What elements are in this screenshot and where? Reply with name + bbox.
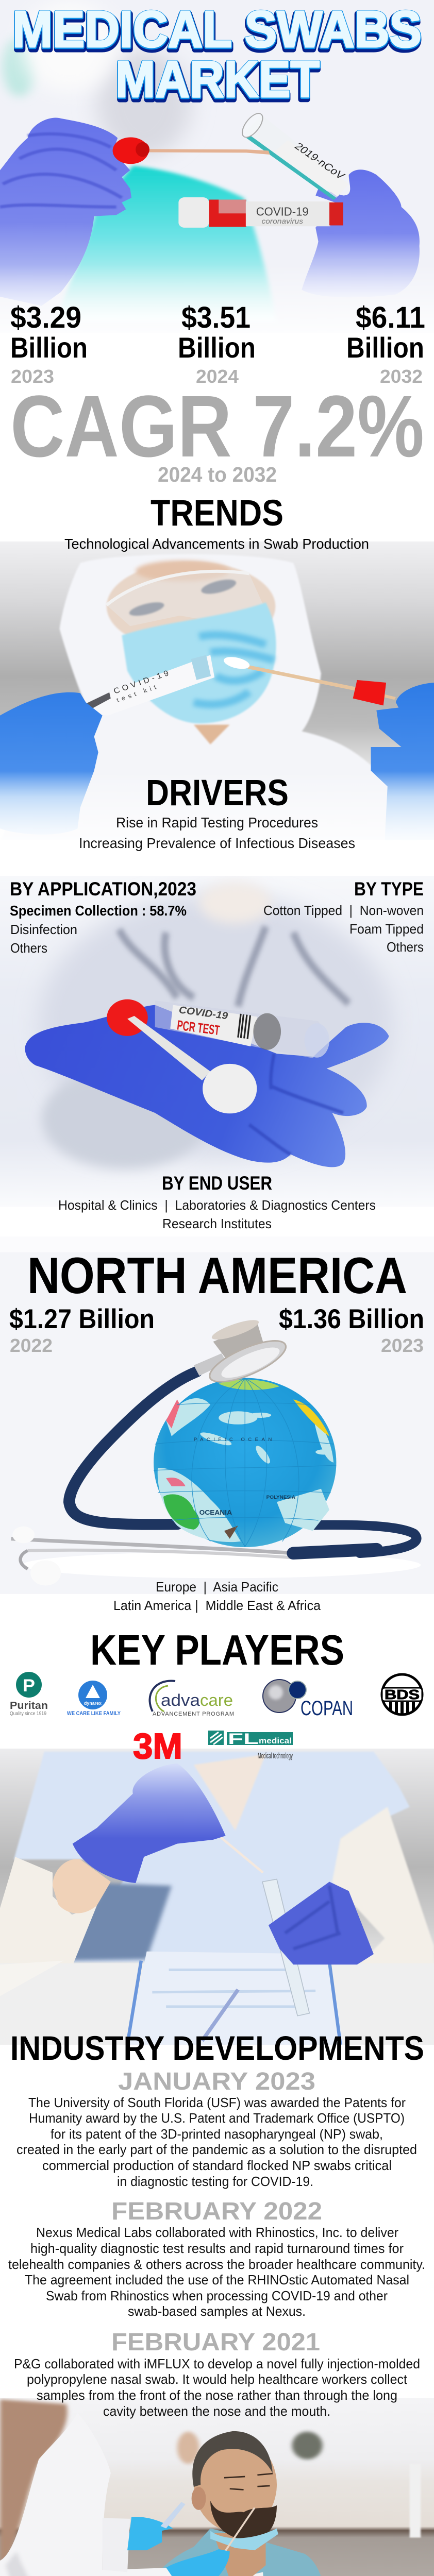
stethoscope chest piece <box>194 1316 291 1390</box>
segment: by end user: Hospital & Clinics | Laboratories & Diagnostics Centers <box>58 1197 376 1213</box>
doctor: hair <box>0 2399 68 2565</box>
right glove <box>302 170 420 297</box>
development: January 2023: in diagnostic testing for COVID-19. <box>117 2174 313 2189</box>
patient: head <box>192 2431 277 2540</box>
logo: BDS <box>382 1674 422 1715</box>
title <box>12 1 422 111</box>
PCR tube <box>155 1001 329 1058</box>
patient: t-shirt <box>231 2572 270 2576</box>
doctor: coat shadow <box>6 2551 75 2576</box>
neck <box>194 725 230 744</box>
swab stick <box>127 1016 210 1080</box>
teal gown <box>63 163 272 307</box>
patient: shirt <box>130 2529 341 2576</box>
doctor: white coat <box>0 2413 177 2576</box>
swab stick <box>144 149 270 155</box>
segment: by end user: Research Institutes <box>162 1216 272 1231</box>
development: January 2023: JANUARY 2023 <box>118 2068 315 2095</box>
logo: AdvaCare: care <box>200 1691 233 1709</box>
logo: Puritan: Puritan <box>10 1700 48 1711</box>
stat: 2024 market size <box>178 301 256 387</box>
tube: 2019-nCoV <box>238 111 349 200</box>
logo: AdvaCare: ADVANCEMENT PROGRAM <box>153 1711 234 1717</box>
logo: AdvaCare: adva <box>161 1691 200 1709</box>
development: February 2022: Nexus Medical Labs collaborated with Rhinostics, Inc. to deliver <box>36 2225 398 2240</box>
development: February 2021: samples from the front of the nose rather than through the long <box>37 2387 397 2403</box>
logo: BDS: BDS <box>385 1687 420 1702</box>
segment: by type: BY TYPE <box>354 878 424 900</box>
red swab cap <box>107 999 148 1036</box>
segment: by type: Others <box>387 939 424 955</box>
title: MARKET <box>116 53 319 111</box>
table <box>0 1963 434 2045</box>
stat: 2024 market size: Billion <box>178 331 256 364</box>
logo: Puritan <box>10 1672 48 1717</box>
left glove <box>73 1764 226 1883</box>
segment: by end user <box>58 1173 376 1231</box>
trends heading: TRENDS <box>151 493 283 534</box>
test kit tube <box>87 655 214 708</box>
development: February 2021: cavity between the nose and the mouth. <box>103 2403 330 2419</box>
stethoscope tube back <box>69 1372 416 1553</box>
lower cyan glove <box>166 2549 230 2576</box>
development: February 2022: The agreement included the use of the RHINOstic Automated Nasal <box>25 2272 409 2287</box>
right glove <box>269 1882 374 1964</box>
other regions list: Europe | Asia Pacific <box>156 1579 278 1595</box>
tube: 2019-nCoV: 2019-nCoV <box>292 141 347 181</box>
development: February 2022: high-quality diagnostic test results and rapid turnaround times for <box>30 2241 404 2256</box>
stat: 2023 market size: 2023 <box>11 366 54 387</box>
other regions list <box>113 1579 321 1613</box>
test kit tube: COVID-19 <box>112 669 172 696</box>
nasal swab <box>224 2507 255 2553</box>
development: February 2022: FEBRUARY 2022 <box>111 2198 322 2225</box>
swab head <box>203 1064 257 1113</box>
stat: 2023 market size: Billion <box>10 331 88 364</box>
trends text: Technological Advancements in Swab Production <box>64 536 369 552</box>
segment: by application: Specimen Collection : 58.7% <box>10 903 187 919</box>
other regions list: Latin America | Middle East & Africa <box>113 1598 321 1613</box>
PCR tube: PCR TEST <box>176 1018 221 1038</box>
blurred room decor <box>177 2432 421 2537</box>
logo: Puritan: Quality since 1919 <box>10 1711 46 1717</box>
segment: by application: Disinfection <box>10 922 77 937</box>
globe: OCEANIA <box>199 1509 232 1516</box>
stat: 2023 market size: $3.29 <box>10 301 81 334</box>
title: MARKET <box>115 51 320 109</box>
segment: by end user: BY END USER <box>162 1173 272 1194</box>
title: MARKET <box>115 50 320 108</box>
segmentation illustration: gloved hand holding swab and PCR tube <box>0 876 434 1207</box>
test vial <box>262 1879 309 2016</box>
upper cyan glove with tube <box>127 2502 186 2550</box>
drivers list: Rise in Rapid Testing Procedures <box>116 815 318 831</box>
logo: AdvaCare <box>149 1681 234 1717</box>
logo: Dynarex <box>67 1681 121 1717</box>
globe: PACIFIC OCEAN <box>194 1436 274 1442</box>
left glove <box>0 692 103 835</box>
development: January 2023: created in the early part of the pandemic as a solution to the disrupted <box>16 2142 417 2157</box>
blue glove palm <box>25 1005 389 1167</box>
test kit tube: test kit <box>115 683 158 704</box>
red swab cap <box>113 138 149 164</box>
blurred coat <box>39 882 393 1169</box>
region stat: 2023: 2023 <box>381 1335 424 1356</box>
logo: FL medical <box>208 1731 293 1760</box>
development: January 2023 <box>16 2068 417 2189</box>
closing illustration: nasal swab being taken from a patient <box>0 2398 434 2576</box>
drivers list <box>79 815 355 851</box>
logo: 3M: 3M <box>133 1726 182 1766</box>
segment: by application: BY APPLICATION,2023 <box>10 878 196 900</box>
logo: Dynarex: dynarex <box>84 1701 102 1706</box>
segment: by application: Others <box>10 940 47 956</box>
scrubs <box>14 1752 410 1962</box>
cotton swab with red cap <box>223 655 396 705</box>
logo: FL medical: medical <box>259 1737 292 1745</box>
CAGR callout: 2024 to 2032 <box>158 463 277 486</box>
pulled-down face mask <box>210 2529 278 2550</box>
region stat: 2023 <box>279 1304 424 1356</box>
stat: 2032 market size: 2032 <box>380 366 423 387</box>
left glove <box>0 117 131 306</box>
globe <box>154 1378 336 1547</box>
protective hood <box>59 554 387 786</box>
development: February 2022 <box>8 2198 425 2319</box>
logo: Dynarex: WE CARE LIKE FAMILY <box>67 1710 121 1717</box>
region stat: 2022: $1.27 Billion <box>9 1304 155 1334</box>
globe: POLYNESIA <box>266 1494 295 1500</box>
drivers list: Increasing Prevalence of Infectious Diseases <box>79 835 355 851</box>
key players illustration: gloved hands with swab and vial <box>0 1749 434 2045</box>
segment: by type: Foam Tipped <box>349 921 424 937</box>
region stat: 2022: 2022 <box>10 1335 53 1356</box>
stethoscope metal ear tubes <box>11 1527 376 1586</box>
tube: COVID-19 coronavirus <box>178 197 343 228</box>
stat: 2024 market size: 2024 <box>196 366 239 387</box>
stat: 2032 market size: Billion <box>346 331 424 364</box>
neckline skin <box>194 1754 266 1831</box>
logo: Copan: COPAN <box>301 1697 353 1720</box>
development: February 2022: telehealth companies & others across the broader healthcare community. <box>8 2257 425 2272</box>
drivers heading: DRIVERS <box>146 773 289 814</box>
stat: 2023 market size <box>10 301 88 387</box>
development: January 2023: for its patent of the 3D-printed nasopharyngeal (NP) swab, <box>51 2126 383 2142</box>
PCR tube: COVID-19 <box>178 1005 229 1022</box>
segment: by application <box>10 878 196 956</box>
logo: FL medical: FL <box>228 1731 259 1748</box>
development: February 2022: swab-based samples at Nexus. <box>128 2303 306 2319</box>
stat: 2032 market size <box>346 301 425 387</box>
development: February 2021: FEBRUARY 2021 <box>111 2329 320 2356</box>
surgical mask <box>122 602 276 723</box>
clipboard with pen <box>127 1952 343 2045</box>
swab <box>154 1778 263 1873</box>
logo: Copan <box>263 1680 353 1720</box>
stat: 2032 market size: $6.11 <box>356 301 425 334</box>
development: February 2022: Swab from Rhinostics when processing COVID-19 and other <box>46 2288 388 2303</box>
right arm <box>332 1807 434 1970</box>
development: January 2023: Humanity award by the U.S. Patent and Trademark Office (USPTO) <box>29 2110 405 2126</box>
right glove <box>371 683 434 840</box>
development: February 2021: P&G collaborated with iMFLUX to develop a novel fully injection-molded <box>14 2356 420 2371</box>
logo: Puritan: P <box>23 1676 35 1696</box>
key players heading: KEY PLAYERS <box>90 1626 344 1674</box>
region stat: 2023: $1.36 Billion <box>279 1304 424 1334</box>
infographic: medical swabs market: Medical technology <box>258 1752 293 1760</box>
segment: by type <box>263 878 424 955</box>
development: January 2023: commercial production of standard flocked NP swabs critical <box>42 2158 392 2173</box>
trends illustration: health worker in mask with test kit <box>0 541 434 842</box>
left arm <box>0 1857 111 1999</box>
development: February 2021: polypropylene nasal swab. It would help healthcare workers collect <box>27 2371 408 2387</box>
stat: 2024 market size: $3.51 <box>181 301 251 334</box>
doctor: sleeve <box>103 2518 130 2572</box>
hero illustration: gloved hands with swab and test tubes <box>0 0 434 333</box>
segment: by type: Cotton Tipped | Non-woven <box>263 903 424 918</box>
face <box>106 558 276 635</box>
tube: COVID-19 coronavirus: coronavirus <box>261 218 304 226</box>
region stat: 2022 <box>9 1304 155 1356</box>
tube: COVID-19 coronavirus: COVID-19 <box>256 206 309 218</box>
development: February 2021 <box>14 2329 420 2419</box>
regional illustration: stethoscope around globe <box>0 1236 434 1594</box>
development: January 2023: The University of South Florida (USF) was awarded the Patents for <box>28 2095 406 2110</box>
patient: neck <box>213 2533 266 2576</box>
